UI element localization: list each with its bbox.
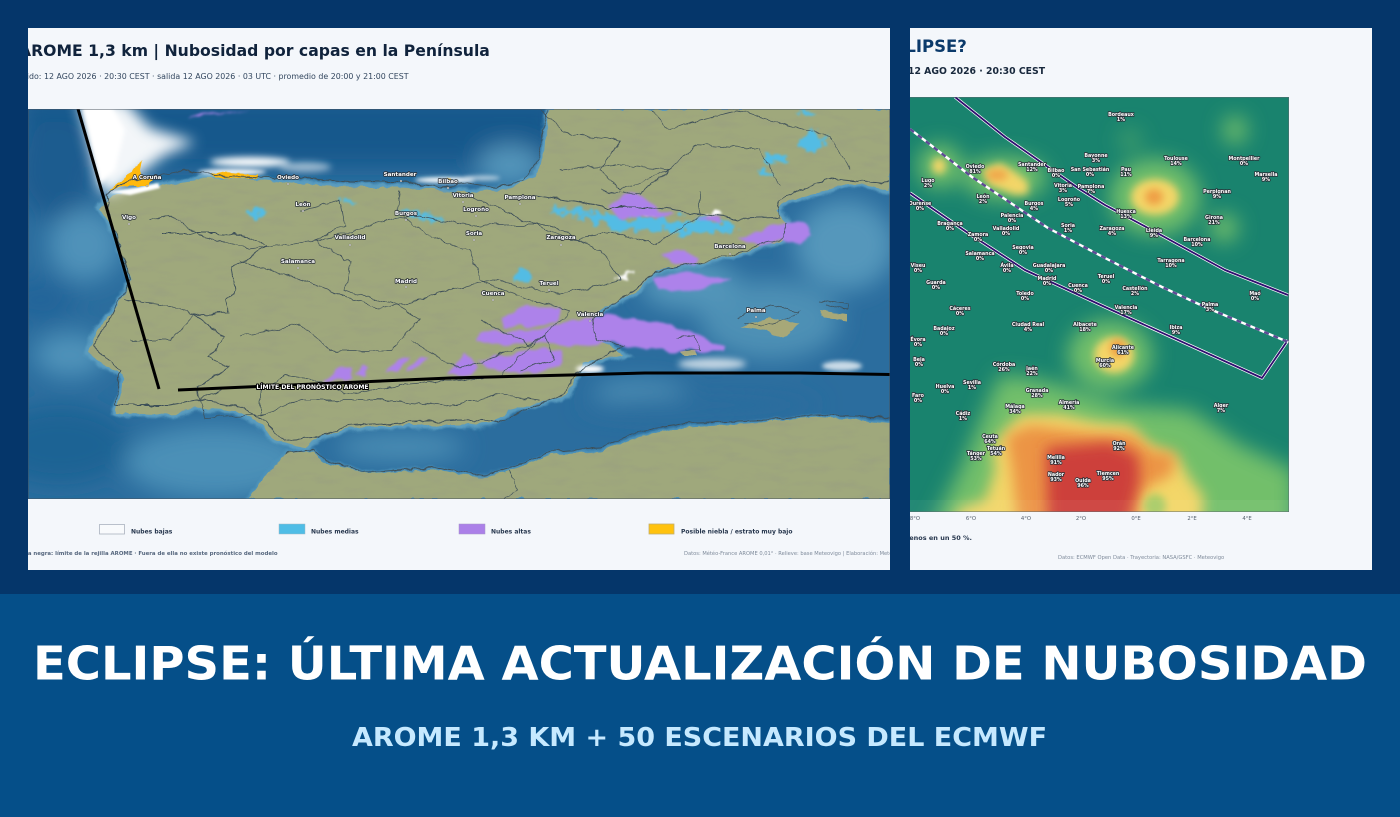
city probability labels: Madrid [1038, 276, 1057, 282]
city probability labels: Ávila [1000, 262, 1014, 269]
city labels: Vigo [122, 215, 136, 221]
city probability labels: 3% [1206, 307, 1214, 313]
panel: AROME cloud map [28, 28, 890, 570]
city probability labels: 14% [1170, 161, 1182, 167]
city probability labels: Pau [1121, 167, 1132, 173]
city probability labels: 0% [1240, 161, 1248, 167]
city labels: Logroño [463, 207, 489, 213]
city labels: Cuenca [482, 291, 505, 297]
city probability labels: 21% [1208, 220, 1220, 226]
fog and very low stratus [108, 161, 452, 190]
city probability labels: 0% [1043, 281, 1051, 287]
city probability labels: 34% [1009, 409, 1021, 415]
map axis labels: 0°E [1131, 516, 1141, 522]
city probability labels: Nador [1048, 472, 1065, 478]
city probability labels: Zaragoza [1099, 226, 1125, 232]
city probability labels: Almería [1059, 399, 1079, 406]
city probability labels: Málaga [1005, 403, 1025, 410]
city probability labels: Guadalajara [1033, 263, 1065, 269]
city labels: Barcelona [714, 244, 746, 250]
city probability labels: Beja [913, 357, 925, 363]
city probability labels: Montpellier [1228, 156, 1260, 162]
city probability labels: Salamanca [965, 251, 995, 257]
city probability labels: Pamplona [1078, 184, 1104, 190]
high clouds [187, 109, 812, 380]
yellow North Africa zone [946, 414, 1204, 540]
banner title: ECLIPSE: ÚLTIMA ACTUALIZACIÓN DE NUBOSIDAD [33, 636, 1367, 690]
city probability labels: Tlemcen [1097, 471, 1120, 477]
heading: AROME title: AROME 1,3 km | Nubosidad por capas en la Península [28, 41, 490, 60]
city probability labels: Bayonne [1084, 153, 1108, 159]
city labels: Vitoria [452, 193, 474, 199]
city probability labels: 1% [968, 385, 976, 391]
medium clouds [247, 110, 825, 282]
city probability labels: Logroño [1058, 197, 1081, 203]
city probability labels: 11% [1120, 172, 1132, 178]
city probability labels [880, 112, 1278, 489]
city probability labels: 61% [1117, 350, 1129, 356]
city labels: Pamplona [504, 195, 536, 201]
city probability labels: 0% [1021, 296, 1029, 302]
city probability labels: 4% [1030, 206, 1038, 212]
city probability labels: 1% [959, 416, 967, 422]
city probability labels: 2% [1131, 291, 1139, 297]
panel: eclipse visibility probability map [910, 28, 1372, 570]
legend: cloud layers: Nubes altas [491, 528, 531, 536]
city probability labels: 0% [940, 331, 948, 337]
city probability labels: Toulouse [1164, 156, 1189, 162]
city probability labels: 54% [990, 451, 1002, 457]
city probability labels: 0% [941, 389, 949, 395]
city probability labels: Teruel [1098, 274, 1115, 280]
city probability labels: 0% [974, 237, 982, 243]
city labels: Salamanca [281, 259, 315, 265]
green halos [918, 116, 1295, 540]
city probability labels: 26% [998, 367, 1010, 373]
city probability labels: 0% [932, 285, 940, 291]
AROME grid limit lines [78, 109, 890, 390]
city probability labels: 10% [1165, 263, 1177, 269]
eclipse totality path lines [910, 97, 1288, 378]
city probability labels: 9% [1150, 233, 1158, 239]
legend: cloud layers: Nubes medias [311, 528, 359, 536]
city probability labels: 7% [1217, 408, 1225, 414]
city probability labels: Albacete [1073, 322, 1098, 328]
city probability labels: 1% [1117, 117, 1125, 123]
city probability labels: 9% [1172, 330, 1180, 336]
city probability labels: Cáceres [949, 305, 971, 312]
city probability labels: Marsella [1254, 172, 1278, 178]
city probability labels: 60% [1099, 363, 1111, 369]
city probability labels: Oujda [1075, 478, 1091, 484]
city probability labels: Lugo [921, 178, 935, 184]
city probability labels: Badajoz [933, 326, 955, 332]
orange North Africa zone [1006, 425, 1176, 540]
banner subtitle: AROME 1,3 KM + 50 ESCENARIOS DEL ECMWF [352, 723, 1047, 753]
city probability labels: 92% [1113, 446, 1125, 452]
city labels: Valencia [577, 312, 603, 318]
city probability labels: 0% [1045, 268, 1053, 274]
city probability labels: 0% [1052, 173, 1060, 179]
city probability labels: Viseu [911, 263, 926, 269]
city probability labels: Faro [912, 393, 925, 399]
city probability labels: Huesca [1116, 209, 1136, 215]
city probability labels: Santander [1018, 162, 1047, 168]
sea background [0, 95, 895, 499]
city probability labels: Lleida [1146, 228, 1162, 234]
city labels: Madrid [395, 279, 417, 285]
city probability labels: 17% [1120, 310, 1132, 316]
city probability labels: 0% [1003, 268, 1011, 274]
city probability labels: Barcelona [1184, 237, 1210, 243]
city probability labels: Ibiza [1170, 325, 1182, 331]
subtitle: date and time: 12 AGO 2026 · 20:30 CEST [910, 66, 1045, 77]
city labels: Zaragoza [546, 235, 576, 241]
city probability labels: Perpignan [1203, 189, 1231, 195]
city probability labels: 41% [1063, 405, 1075, 411]
city probability labels: 5% [1065, 202, 1073, 208]
city probability labels: Murcia [1096, 358, 1114, 364]
city probability labels: 0% [914, 342, 922, 348]
city probability labels: 93% [1050, 477, 1062, 483]
banner: main title block [0, 594, 1400, 817]
city labels: Valladolid [334, 235, 366, 241]
city probability labels: 10% [1191, 242, 1203, 248]
city probability labels: Oviedo [966, 164, 985, 170]
city labels: Soria [466, 231, 482, 237]
city probability labels: Vitoria [1054, 183, 1072, 189]
city probability labels: Palencia [1001, 213, 1023, 219]
legend: cloud layers: Posible niebla / estrato muy bajo [681, 528, 792, 536]
city probability labels: 0% [1251, 296, 1259, 302]
city probability labels: 0% [1102, 279, 1110, 285]
map axis labels: 8°O [910, 516, 920, 522]
city probability labels: 0% [946, 226, 954, 232]
land masses [88, 109, 890, 499]
city probability labels: 0% [915, 362, 923, 368]
city probability labels: 0% [914, 268, 922, 274]
city probability labels: 3% [1059, 188, 1067, 194]
city probability labels: 1% [1064, 228, 1072, 234]
city probability labels: 0% [916, 206, 924, 212]
map axis labels: 4°O [1021, 516, 1031, 522]
map axis labels: 2°O [1076, 516, 1086, 522]
city probability labels: Zamora [968, 232, 988, 238]
city probability labels: 0% [1086, 172, 1094, 178]
city probability labels: Soria [1061, 223, 1075, 229]
city probability labels: 81% [969, 169, 981, 175]
label: AROME forecast limit: LÍMITE DEL PRONÓSTICO AROME [256, 382, 369, 391]
map: cloud probability heat map [910, 97, 1289, 512]
city probability labels: Segovia [1012, 245, 1034, 251]
yellow zones [932, 158, 1179, 373]
city probability labels: Melilla [1047, 455, 1065, 461]
borders and coastline [92, 109, 890, 499]
city probability labels: 53% [970, 456, 982, 462]
city probability labels: Burgos [1024, 201, 1044, 207]
city labels: Teruel [539, 281, 559, 287]
city probability labels: 0% [914, 398, 922, 404]
city probability labels: Palma [1202, 302, 1218, 308]
city probability labels: 18% [1079, 327, 1091, 333]
city probability labels: 4% [1024, 327, 1032, 333]
city probability labels: 2% [979, 199, 987, 205]
legend: cloud layers [99, 524, 792, 536]
city probability labels: 22% [1026, 371, 1038, 377]
city labels: Santander [384, 172, 417, 178]
city probability labels: Valencia [1115, 305, 1137, 311]
city probability labels: 2% [924, 183, 932, 189]
city probability labels: 0% [976, 256, 984, 262]
city probability labels: San Sebastián [1071, 166, 1110, 173]
green gap over North Africa [1144, 494, 1166, 518]
city probability labels: 4% [1108, 231, 1116, 237]
city probability labels: Bordeaux [1108, 112, 1135, 118]
city probability labels: 0% [1074, 288, 1082, 294]
city probability labels: Granada [1026, 388, 1048, 394]
city probability labels: Cuenca [1068, 283, 1088, 289]
city probability labels: 0% [1019, 250, 1027, 256]
map axis labels: 2°E [1187, 516, 1197, 522]
city probability labels: Maó [1249, 290, 1261, 297]
city labels: Burgos [395, 211, 418, 217]
credits: ECMWF data sources: Datos: ECMWF Open Data · Trayectoria: NASA/GSFC · Meteovigo [1058, 555, 1224, 561]
city probability labels: Cádiz [956, 410, 971, 417]
city probability labels: Orán [1112, 440, 1126, 447]
low clouds [78, 100, 862, 373]
city probability labels: Tetuán [987, 445, 1006, 452]
city probability labels: Ciudad Real [1012, 322, 1044, 328]
city probability labels: 91% [1050, 460, 1062, 466]
city probability labels: Tánger [967, 450, 986, 457]
city probability labels: Castellón [1122, 285, 1148, 292]
map axis labels [910, 516, 1252, 522]
city labels: A Coruña [133, 175, 162, 181]
city labels: Palma [746, 308, 766, 314]
city probability labels: 13% [1120, 214, 1132, 220]
city probability labels: 0% [956, 311, 964, 317]
city probability labels: Valladolid [993, 226, 1020, 232]
city probability labels: 64% [984, 439, 996, 445]
city probability labels: Évora [910, 335, 926, 343]
city probability labels: León [976, 193, 990, 200]
city labels: León [295, 201, 311, 208]
red core [1046, 442, 1140, 540]
city probability labels: 12% [1026, 167, 1038, 173]
city markers [128, 180, 757, 322]
city probability labels: Bragança [937, 221, 963, 227]
city probability labels: Guarda [926, 280, 946, 286]
city labels: Oviedo [277, 175, 299, 181]
city probability labels: 0% [1002, 231, 1010, 237]
city probability labels: Córdoba [993, 361, 1015, 368]
city probability labels: Ceuta [982, 434, 998, 440]
city labels: Bilbao [438, 179, 458, 185]
city probability labels: 28% [1031, 393, 1043, 399]
city probability labels: 0% [1008, 218, 1016, 224]
city probability labels: 9% [1213, 194, 1221, 200]
city probability labels: 7% [1087, 189, 1095, 195]
city probability labels: Huelva [936, 384, 954, 390]
city probability labels: Sevilla [963, 380, 981, 386]
city probability labels: Toledo [1016, 291, 1034, 297]
map axis labels: 4°E [1242, 516, 1252, 522]
city probability labels: Jaén [1025, 365, 1038, 372]
map axis labels: 6°O [966, 516, 976, 522]
orange core zones [986, 169, 1163, 357]
city labels [122, 172, 766, 318]
city probability labels: Bilbao [1048, 168, 1065, 174]
legend: cloud layers: Nubes bajas [131, 528, 173, 536]
city probability labels: 95% [1102, 476, 1114, 482]
city probability labels: Alger [1214, 403, 1229, 409]
city probability labels: 3% [1092, 158, 1100, 164]
map: cloud layers over Iberian Peninsula [28, 109, 890, 499]
city probability labels: 9% [1262, 177, 1270, 183]
city probability labels: 96% [1077, 483, 1089, 489]
terrain relief [88, 109, 890, 499]
city probability labels: Girona [1205, 215, 1223, 221]
city probability labels: Alicante [1112, 345, 1135, 351]
city probability labels: Tarragona [1157, 258, 1185, 264]
